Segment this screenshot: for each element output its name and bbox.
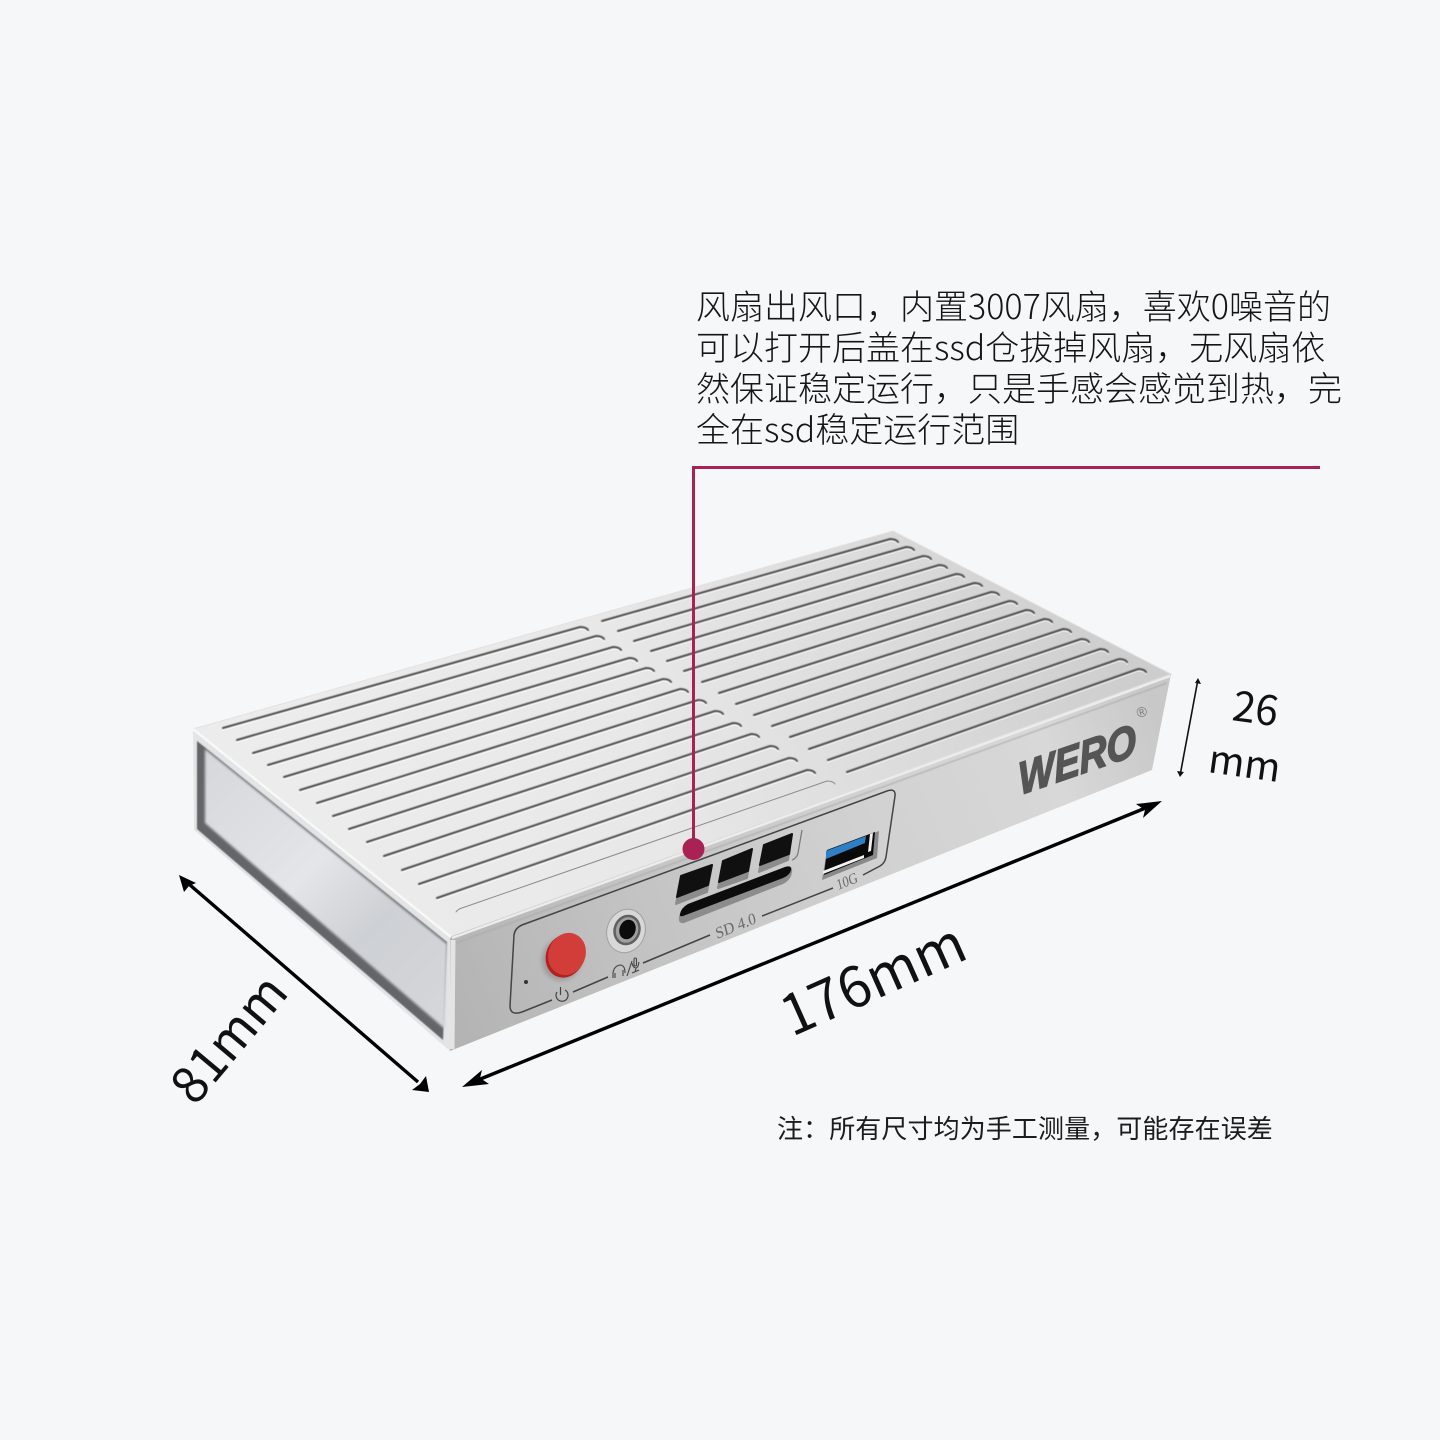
footnote: 注：所有尺寸均为手工测量，可能存在误差 [777, 1109, 1273, 1146]
audio jack [601, 904, 651, 958]
dimension arrow: 26mm [1177, 678, 1201, 777]
dimension label: 26: 26 [1229, 672, 1283, 738]
SD card slot [679, 866, 792, 923]
top face with ventilation slots [193, 531, 1171, 937]
headphone and microphone icon [613, 958, 639, 978]
slots: right group [602, 539, 1146, 774]
port panel outline [510, 790, 895, 1013]
power button [536, 927, 592, 987]
dimension label: mm: mm [1205, 728, 1285, 794]
USB port [822, 831, 879, 880]
registered mark: ® [1135, 703, 1149, 721]
left side face [193, 729, 450, 1051]
dimension label: 81mm: 81mm [151, 957, 302, 1117]
10G label: 10G [835, 870, 859, 894]
WERO logo: WERO [1017, 715, 1138, 805]
fan outlet vents [676, 830, 802, 904]
callout description text: 全在ssd稳定运行范围 [696, 403, 1019, 452]
callout description text: 可以打开后盖在ssd仓拔掉风扇，无风扇依 [696, 321, 1325, 370]
product: WERO enclosure [193, 531, 1171, 1051]
slots: left group [223, 627, 835, 912]
dimension arrow: 81mm [179, 875, 429, 1092]
power LED dot [524, 980, 528, 984]
dimension label: 176mm: 176mm [766, 899, 977, 1052]
callout description text: 风扇出风口，内置3007风扇，喜欢0噪音的 [696, 280, 1331, 329]
SD 4.0 label: SD 4.0 [714, 910, 758, 943]
callout description text: 然保证稳定运行，只是手感会感觉到热，完 [696, 362, 1342, 411]
callout leader line and dot [682, 468, 1320, 860]
power icon [556, 987, 568, 1001]
callout description text [696, 280, 1342, 452]
dimension arrow: 176mm [462, 801, 1162, 1087]
front face [193, 674, 1171, 1051]
